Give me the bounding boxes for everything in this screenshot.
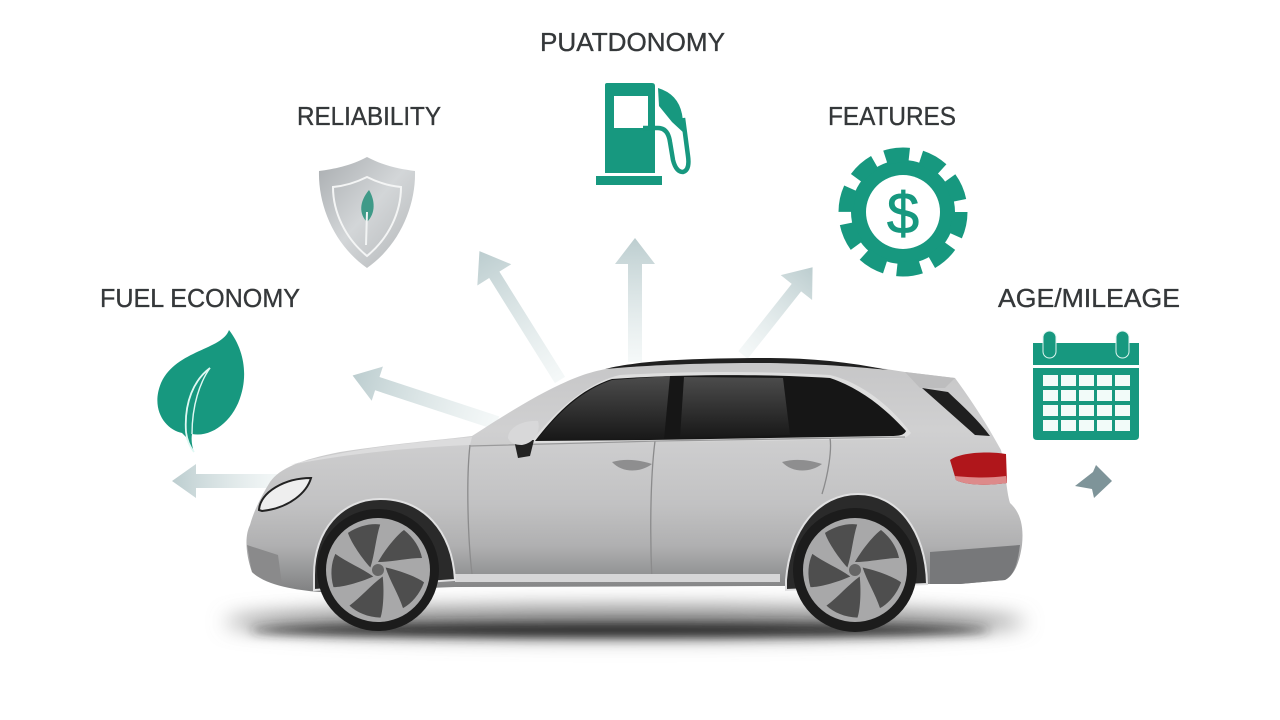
door lines <box>468 438 831 582</box>
belt line <box>470 437 905 446</box>
front window <box>537 376 670 440</box>
headlight <box>259 478 311 511</box>
icon: fuel pump <box>596 83 688 185</box>
hood highlight <box>290 437 472 465</box>
car body <box>246 360 1022 592</box>
car shadow <box>225 606 1025 638</box>
label: fuel economy: FUEL ECONOMY <box>100 283 300 313</box>
spoiler <box>905 372 955 388</box>
mirror <box>508 421 539 458</box>
icon: leaf <box>157 330 244 452</box>
icon: calendar <box>1033 331 1139 440</box>
front rim <box>319 516 430 628</box>
arrow: toward fuel economy <box>172 464 282 498</box>
front tire <box>317 509 439 631</box>
arrow: small right arrow <box>1075 465 1112 498</box>
arrow: toward top <box>615 238 655 362</box>
car <box>246 358 1022 632</box>
middle window <box>680 377 790 438</box>
rear lower bumper <box>930 545 1020 584</box>
side windows dark base <box>535 375 906 441</box>
sill <box>455 574 780 582</box>
icon: gear with dollar sign: $ <box>887 181 919 246</box>
rear rim <box>796 516 907 628</box>
tail light <box>950 452 1007 485</box>
icon: gear with dollar sign <box>846 155 960 269</box>
arrow: toward features <box>727 255 828 367</box>
front wheel arch <box>314 499 455 590</box>
label: garbled top heading: PUATDONOMY <box>540 27 725 57</box>
label: features: FEATURES <box>828 101 956 131</box>
label: age and mileage: AGE/MILEAGE <box>998 283 1180 313</box>
back glass <box>922 388 990 436</box>
label: reliability: RELIABILITY <box>297 101 441 131</box>
arrow: toward reliability <box>462 240 577 391</box>
rear tire <box>793 508 917 632</box>
window frame <box>530 372 911 443</box>
front grille <box>247 545 282 585</box>
rear wheel arch <box>786 494 927 590</box>
roof rail <box>605 358 888 370</box>
door handles <box>612 460 822 471</box>
icon: shield <box>319 157 415 268</box>
arrow: toward upper left <box>347 358 503 440</box>
